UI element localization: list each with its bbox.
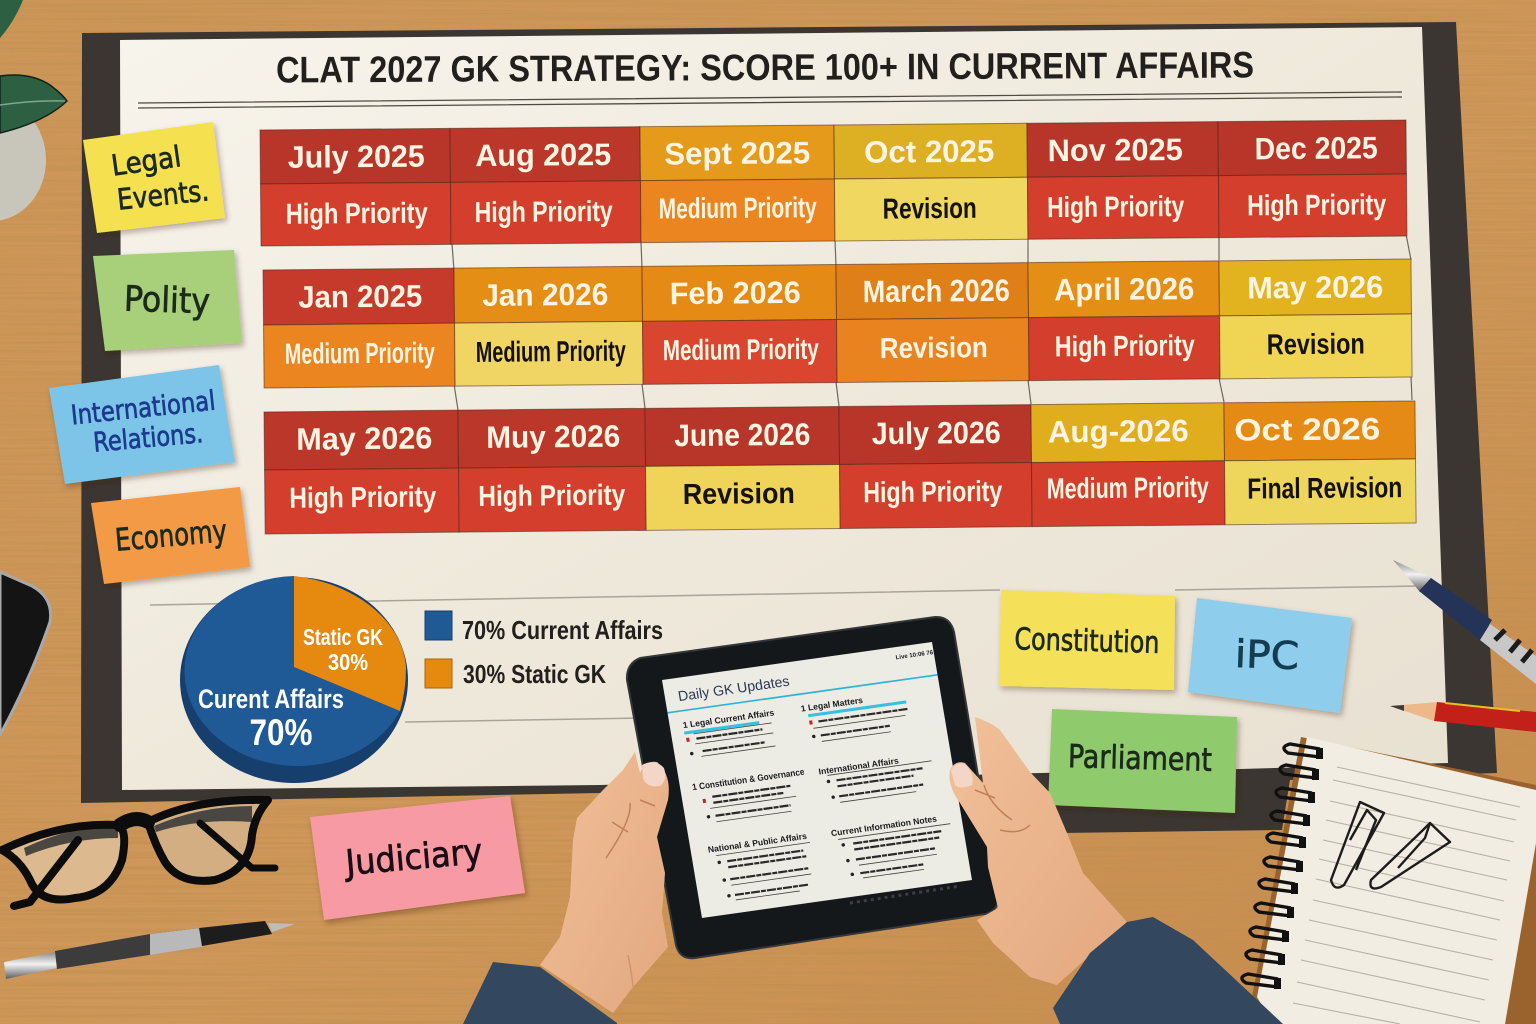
- cell: May 2026: May 2026: [1247, 269, 1383, 306]
- sticky note: International Relations: International: [69, 385, 217, 431]
- title: CLAT 2027 GK STRATEGY: SCORE 100+ IN CURRENT AFFAIRS: [276, 44, 1254, 91]
- cell: Sept 2025: [640, 125, 835, 243]
- section: international affairs: [818, 751, 936, 805]
- left hand holding tablet: [463, 752, 669, 1024]
- calendar row 3: [264, 401, 1416, 534]
- cell: Aug-2026: Medium Priority: [1047, 472, 1209, 505]
- calendar row 2: [263, 259, 1412, 388]
- sticky note: Legal Events: Events.: [115, 173, 211, 217]
- cell: Dec 2025: Dec 2025: [1255, 130, 1378, 166]
- cell: Jan 2026: [454, 266, 643, 386]
- pie depth: [180, 577, 408, 783]
- sticky note: Judiciary: [310, 796, 525, 920]
- cell: Nov 2025: [1027, 122, 1219, 239]
- cell: Nov 2025: High Priority: [1047, 191, 1184, 224]
- icon: ballpoint pen on desk: [4, 921, 295, 979]
- temple arms: [200, 823, 275, 868]
- cell: Aug 2025: High Priority: [475, 196, 613, 229]
- cell: Oct 2026: Oct 2026: [1234, 411, 1380, 448]
- icon: ballpoint pen top right: [1393, 560, 1536, 684]
- section: current notes: Current Information Notes: [830, 813, 938, 838]
- right hand holding tablet: [949, 717, 1283, 1024]
- cell: Muy 2026: Muy 2026: [486, 419, 620, 455]
- cell: Feb 2026: Feb 2026: [670, 275, 801, 311]
- label: Static GK: Static GK: [303, 624, 383, 650]
- cell: Oct 2025: [834, 123, 1028, 241]
- left sleeve: [463, 962, 617, 1024]
- cell: Oct 2025: Revision: [883, 193, 977, 226]
- tablet screen: [662, 642, 972, 918]
- cell: March 2026: [836, 263, 1029, 382]
- cell: March 2026: Revision: [880, 332, 988, 365]
- section: current notes: [830, 812, 957, 881]
- icon: eyeglasses: [2, 798, 275, 906]
- cell: Oct 2026: Final Revision: [1247, 472, 1402, 506]
- cell: July 2025: July 2025: [288, 139, 425, 175]
- cell: July 2025: High Priority: [286, 198, 428, 231]
- legend item: current affairs: 70% Current Affairs: [462, 615, 663, 645]
- cell: July 2026: [839, 405, 1032, 528]
- notebook: [1242, 737, 1536, 1024]
- cell: Muy 2026: High Priority: [478, 480, 625, 513]
- tablet bottom toolbar: [850, 886, 960, 903]
- cell: Aug-2026: Aug-2026: [1048, 413, 1189, 449]
- cell: July 2026: July 2026: [872, 415, 1001, 451]
- sticky note: IPC: iPC: [1234, 632, 1300, 678]
- cell: Oct 2025: Oct 2025: [864, 134, 994, 170]
- lens tint: [5, 825, 124, 900]
- cell: July 2026: High Priority: [863, 476, 1002, 509]
- cell: June 2026: June 2026: [674, 417, 810, 453]
- poster paper: [120, 27, 1448, 790]
- sticky note: Constitution: Constitution: [1014, 622, 1160, 661]
- right sleeve: [1053, 917, 1283, 1024]
- screen heading: Daily GK Updates: [677, 674, 791, 705]
- icon: red pencil: [1390, 702, 1536, 732]
- cell: Jan 2025: Medium Priority: [285, 337, 435, 371]
- sketch: paper clips: [1331, 802, 1450, 888]
- cell: Jan 2025: [263, 268, 455, 388]
- cell: May 2026: [264, 410, 459, 534]
- cell: Nov 2025: Nov 2025: [1048, 132, 1183, 168]
- status bar: Live 10:06 76: [895, 650, 934, 661]
- cell: Oct 2026: [1224, 401, 1416, 525]
- section: legal affairs: 1 Legal Current Affairs: [682, 707, 775, 730]
- cell: Aug 2025: Aug 2025: [475, 137, 611, 173]
- icon: potted plant: [0, 0, 67, 221]
- cell: April 2026: [1028, 261, 1220, 381]
- sticky note: Economy: Economy: [114, 513, 228, 559]
- poster board: [81, 22, 1497, 833]
- cell: Jan 2025: Jan 2025: [298, 278, 422, 315]
- sticky note: Economy: [91, 487, 250, 584]
- cell: May 2026: High Priority: [289, 481, 436, 515]
- pie chart: [180, 576, 408, 783]
- label: Current Affairs: Curent Affairs: [198, 684, 344, 714]
- cell: April 2026: April 2026: [1054, 271, 1194, 307]
- tablet: [627, 617, 998, 958]
- label: Static GK: 30%: [328, 649, 368, 675]
- icon: smartphone: [0, 572, 51, 735]
- section: constitution and governance: [691, 767, 811, 824]
- section: legal affairs: [682, 707, 780, 758]
- cell: Aug 2025: [450, 127, 641, 244]
- cell: Feb 2026: Medium Priority: [663, 334, 819, 367]
- cell: June 2026: Revision: [683, 478, 795, 511]
- section: legal matters: 1 Legal Matters: [800, 695, 864, 714]
- notebook cover: [1252, 737, 1536, 1024]
- cell: Muy 2026: [458, 408, 646, 532]
- section: international affairs: International Affairs: [818, 755, 900, 777]
- section: constitution and governance: 1 Constitution & Governance: [691, 767, 805, 792]
- sticky note: International Relations: [49, 365, 235, 484]
- label: Static GK: [303, 624, 383, 675]
- sticky note: Polity: [93, 250, 242, 351]
- frames: [2, 825, 124, 900]
- sticky note: Polity: Polity: [123, 280, 211, 322]
- sticky note: Parliament: Parliament: [1068, 737, 1212, 779]
- cell: Feb 2026: [642, 264, 837, 384]
- cell: Jan 2026: Medium Priority: [476, 336, 626, 369]
- cell: March 2026: March 2026: [863, 273, 1010, 309]
- slice: Current Affairs 70%: [185, 576, 400, 766]
- sticky note: Judiciary: Judiciary: [342, 832, 484, 884]
- tablet body: [627, 617, 998, 958]
- section: national affairs: [707, 830, 818, 903]
- sticky note: Constitution: [999, 590, 1175, 690]
- cell: Dec 2025: [1218, 120, 1407, 238]
- cell: Sept 2025: Medium Priority: [659, 192, 817, 226]
- section: national affairs: National & Public Affairs: [707, 831, 808, 855]
- cell: May 2026: May 2026: [296, 420, 432, 457]
- sticky note: IPC: [1188, 598, 1352, 713]
- calendar row 1: [260, 120, 1407, 246]
- cell: Sept 2025: Sept 2025: [664, 135, 810, 171]
- sticky note: International Relations: Relations.: [92, 418, 204, 459]
- sticky note: Parliament: [1048, 709, 1237, 813]
- sticky note: Legal Events: [83, 122, 225, 233]
- notebook spiral binding: [1242, 744, 1323, 989]
- poster dark backing: [81, 22, 1497, 833]
- section: legal matters: [800, 689, 911, 744]
- slice: Static GK 30%: [294, 576, 406, 711]
- legend: [425, 611, 663, 689]
- notebook page: [1257, 737, 1536, 1024]
- cell: Aug-2026: [1031, 403, 1225, 527]
- label: Current Affairs: [198, 684, 344, 753]
- cell: May 2026: [1219, 259, 1412, 379]
- sticky note: Legal Events: Legal: [109, 139, 183, 183]
- label: Current Affairs: 70%: [250, 712, 312, 753]
- cell: July 2025: [260, 128, 451, 246]
- cell: May 2026: Revision: [1267, 328, 1365, 361]
- cell: April 2026: High Priority: [1055, 330, 1195, 363]
- cell: Dec 2025: High Priority: [1247, 189, 1386, 222]
- cell: June 2026: [645, 406, 840, 530]
- legend item: static GK: [425, 659, 606, 689]
- cell: Jan 2026: Jan 2026: [482, 277, 608, 313]
- legend item: current affairs: [425, 611, 663, 645]
- legend item: static GK: 30% Static GK: [463, 659, 606, 689]
